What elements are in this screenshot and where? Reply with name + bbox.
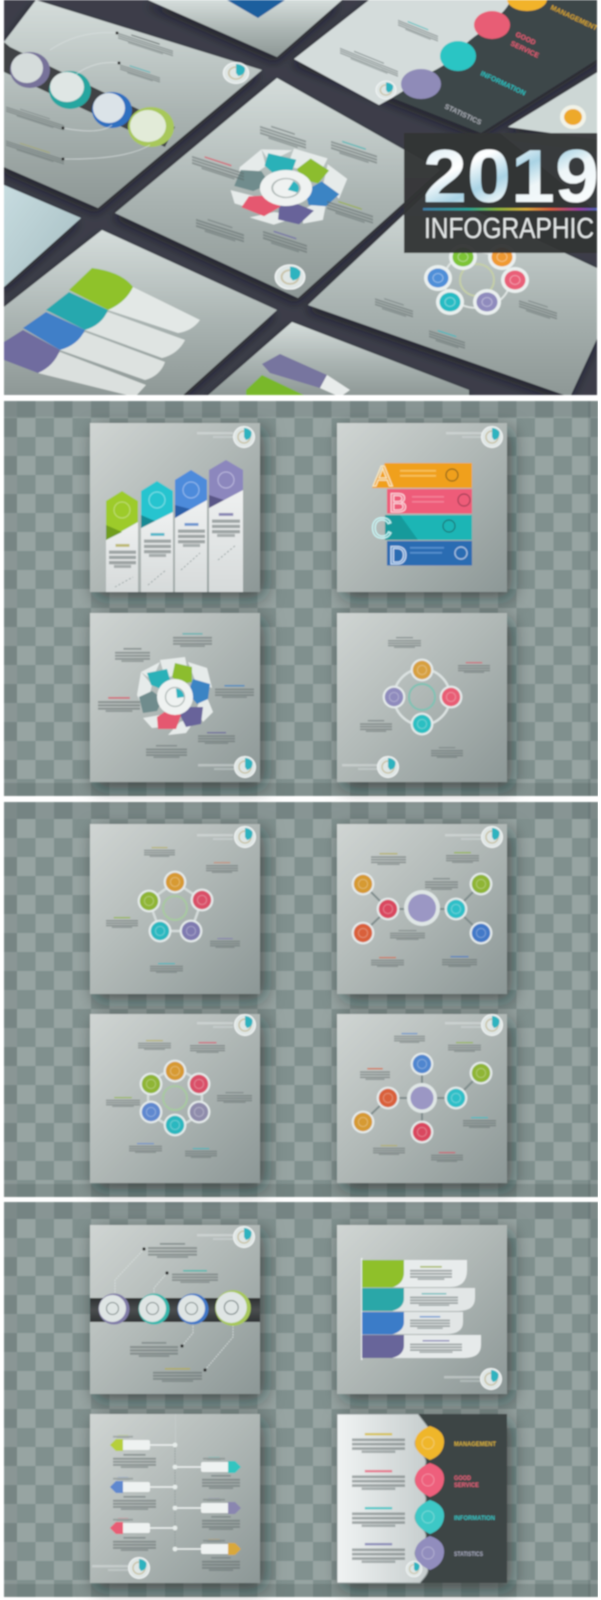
banner: 2019 infographic [404,133,601,253]
panel: star tree card [337,1014,507,1183]
vertical edge [361,1258,362,1360]
panel: hero centre card with petals [115,78,440,298]
text blocks [360,1033,496,1162]
text blocks [98,633,254,758]
icon: logo [482,826,502,848]
logo label [198,764,234,770]
step 3 left blue [110,1477,177,1510]
ribbon B [387,488,472,518]
section: checkered board one [4,401,598,796]
panel: hero right top pale card [507,72,598,134]
centre ring [409,684,435,710]
icon: hero logo one [223,62,249,84]
centre node [407,1083,437,1113]
panel: four node ring card [337,613,507,782]
section: checkered board three [4,1202,598,1597]
column 4: purple hexagon [209,460,243,592]
icon: logo [234,426,254,448]
step 5 left pink [110,1518,177,1551]
panel: hero right card with ring of nodes [308,190,601,397]
icon: logo [482,426,502,448]
connecting ring [394,669,450,725]
text blocks [106,1040,252,1158]
icon: hero logo two [376,81,396,99]
icon: logo [234,756,256,778]
panel: wave with leaf icons on dark card [337,1414,507,1583]
panel: hero card with four circles on a band [4,0,262,208]
ribbon 4: purple [362,1335,481,1358]
right page margin [598,0,601,1600]
centre node [404,890,440,926]
logo label [197,1022,233,1028]
nodes [140,1060,210,1136]
ribbon 1: green [362,1260,467,1288]
logo label [444,1376,480,1382]
logo label [197,432,233,438]
step 6 right amber [173,1539,241,1571]
text blocks [352,1433,405,1563]
timeline axis [174,1445,176,1549]
logo label [197,1234,233,1240]
text blocks [106,847,240,973]
panel: petal cycle card [90,613,260,782]
rainbow rule [423,208,601,210]
nodes [352,1053,492,1143]
icon: logo [480,1368,502,1390]
logo label [446,432,482,438]
light wave half [337,1414,428,1583]
ribbon 2: teal [362,1288,475,1311]
label: information: INFORMATION [454,1516,495,1522]
title: 2019: 2019 [423,134,599,218]
label: service: SERVICE [454,1483,479,1489]
centre ring [163,1086,187,1110]
connector ring [148,1071,202,1125]
icon: logo [234,1226,254,1248]
panel: circles on dark band card [90,1225,260,1394]
leaf pink [415,1463,444,1497]
column 3: blue hexagon [175,470,207,592]
section: checkered board two [4,802,598,1197]
icon: logo small [406,1561,422,1577]
icon: logo [378,756,398,778]
panel: A B C D ribbons card [337,423,507,592]
icon: logo [128,1558,150,1578]
panel: perspective hero [4,0,601,397]
step 4 right grey purple [173,1498,241,1530]
text blocks [360,637,490,758]
ribbon B: B [389,488,407,518]
icon: logo [482,1014,502,1036]
circles [98,1290,251,1326]
connectors [363,884,481,933]
text blocks and dots [130,1243,218,1382]
panel: pentagon nodes card [90,824,260,994]
panel: hero card with wave and labels [294,0,601,133]
dotted leader lines [115,1249,233,1370]
label: management: MANAGEMENT [549,4,599,33]
nodes [138,871,213,942]
label: information: INFORMATION [479,70,526,97]
panel: vertical timeline card [90,1414,260,1583]
label: statistics: STATISTICS [454,1552,483,1558]
ribbon A: A [373,461,393,493]
step 1 left green [110,1435,177,1468]
ribbon C: C [371,513,392,545]
label: statistics: STATISTICS [443,103,482,127]
text blocks [371,852,479,967]
labels [454,1442,496,1558]
icon: hero logo three [275,265,305,289]
leaf amber [415,1426,444,1460]
panel: hexagon step columns card [90,423,260,592]
nodes [383,659,462,735]
ribbon C [371,513,472,545]
label: good: GOOD [454,1476,472,1482]
panel: hero bottom middle card [206,322,469,397]
panel: four ribbon tabs card [337,1225,507,1394]
ribbon D [387,541,472,570]
logo label [92,1565,128,1571]
ribbon D: D [389,542,407,570]
icon: logo [234,1014,256,1036]
leaf lavender [415,1536,444,1570]
label: management: MANAGEMENT [454,1442,496,1448]
panel: branching tree card [337,824,507,994]
column 1: green hexagon [106,491,138,592]
panel: hero top centre card [148,0,342,57]
label: good service: GOOD [514,31,536,47]
column 2: cyan hexagon [141,481,173,592]
dark band [90,1298,260,1322]
upper axis rule [175,1414,176,1445]
logo label [197,834,233,840]
logo label [342,764,378,770]
ribbon 3: blue [362,1312,463,1334]
panel: hero bottom left card with ribbons [4,230,277,397]
panel: hexagon ring nodes card [90,1014,260,1183]
panel: hero left pale card [4,185,81,287]
ribbon A [372,461,472,493]
centre ring [163,896,187,920]
leaf inner rings [422,1437,434,1559]
connector pentagon [149,882,202,931]
logo label [445,1022,481,1028]
nodes [352,873,492,944]
label: good service second line: SERVICE [509,40,540,60]
petal diagram [137,657,213,735]
icon: logo [234,826,256,848]
leaf teal [415,1500,444,1534]
step 2 right teal [173,1457,241,1489]
logo label [445,834,481,840]
connectors [363,1064,481,1132]
